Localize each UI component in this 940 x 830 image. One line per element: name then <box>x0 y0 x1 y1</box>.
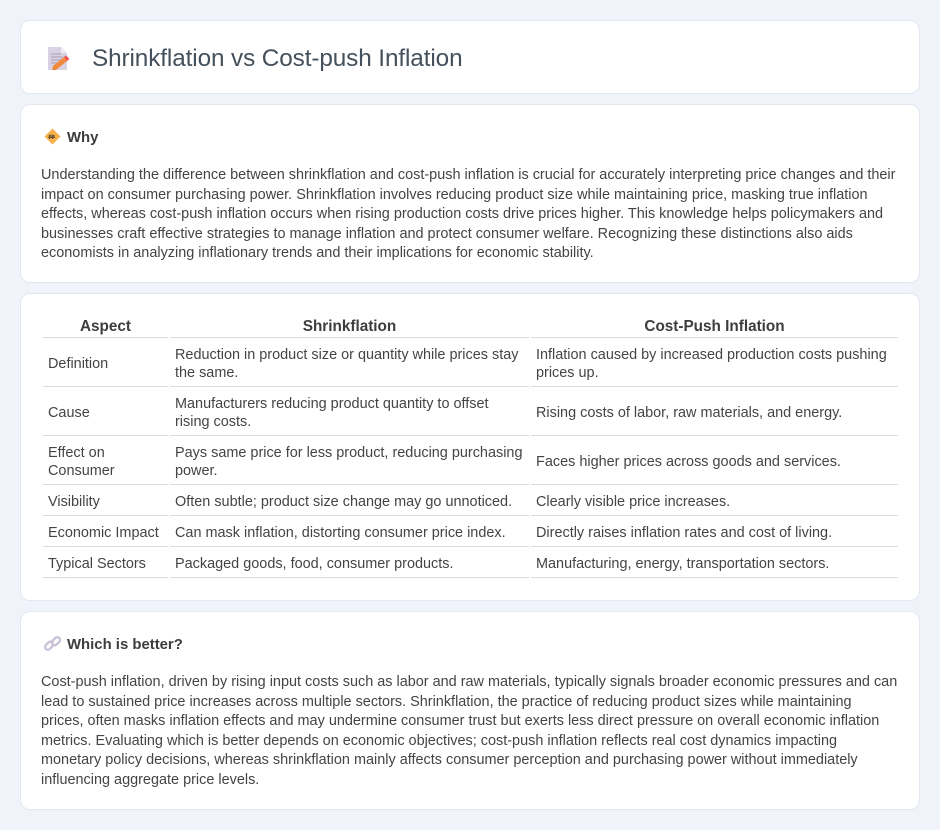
text block: which is better: Cost-push inflation, driven by rising input costs such as labor and raw materials, typically signals broader economic pressures and can <box>41 674 897 690</box>
comparison table: Typical Sectors <box>48 556 146 572</box>
comparison table: Inflation caused by increased production costs pushing <box>536 347 887 363</box>
comparison table: Rising costs of labor, raw materials, and energy. <box>536 405 842 421</box>
panel: which is better <box>20 611 920 810</box>
text block: why: Understanding the difference between shrinkflation and cost-push inflation is crucial for accurately interpreting price changes and their <box>41 167 895 183</box>
comparison table: Directly raises inflation rates and cost of living. <box>536 525 832 541</box>
comparison table: Visibility <box>48 494 100 510</box>
comparison table: the same. <box>175 365 238 381</box>
text block: why: businesses craft effective strategies to manage inflation and protect consumer welfare. Recognizing these distinctions also aids <box>41 226 853 242</box>
comparison table <box>43 318 898 578</box>
panel: comparison table <box>20 293 920 601</box>
comparison table: Faces higher prices across goods and services. <box>536 454 841 470</box>
comparison table: prices up. <box>536 365 599 381</box>
comparison table: Effect on <box>48 445 105 461</box>
table header: cost-push inflation: Cost-Push Inflation <box>644 318 785 335</box>
comparison table: Can mask inflation, distorting consumer price index. <box>175 525 506 541</box>
comparison table: power. <box>175 463 218 479</box>
heading: which is better: Which is better? <box>67 637 183 653</box>
icon: warning diamond <box>44 128 60 144</box>
panel: header <box>20 20 920 94</box>
text block: why <box>41 167 896 261</box>
comparison table: Packaged goods, food, consumer products. <box>175 556 454 572</box>
table header: aspect: Aspect <box>80 318 131 335</box>
comparison table: Clearly visible price increases. <box>536 494 730 510</box>
comparison table: Often subtle; product size change may go unnoticed. <box>175 494 512 510</box>
title: Shrinkflation vs Cost-push Inflation <box>92 45 462 72</box>
icon: document with pencil <box>48 47 70 70</box>
comparison table: Reduction in product size or quantity while prices stay <box>175 347 518 363</box>
comparison table: Cause <box>48 405 90 421</box>
text block: why: impact on consumer purchasing power. Shrinkflation involves reducing product size while maintaining price, masking true inflation <box>41 187 868 203</box>
text block: why: effects, whereas cost-push inflation occurs when rising production costs drive prices higher. This knowledge helps policymakers and <box>41 206 883 222</box>
comparison table: Manufacturing, energy, transportation sectors. <box>536 556 829 572</box>
heading: why: Why <box>67 130 98 146</box>
comparison table: Pays same price for less product, reducing purchasing <box>175 445 522 461</box>
text block: which is better: metrics. Evaluating which is better depends on economic objectives; cost-push inflation reflects real cost dynamics impacting <box>41 733 837 749</box>
text block: which is better: monetary policy decisions, whereas shrinkflation mainly affects consumer perception and purchasing power without immediately <box>41 752 858 768</box>
comparison table: Manufacturers reducing product quantity to offset <box>175 396 489 412</box>
comparison table: rising costs. <box>175 414 251 430</box>
comparison table: Definition <box>48 356 108 372</box>
comparison table: Consumer <box>48 463 115 479</box>
text block: which is better: influencing aggregate price levels. <box>41 772 259 788</box>
text block: why: economists in analyzing inflationary trends and their implications for economic stability. <box>41 245 594 261</box>
icon: link <box>44 636 61 651</box>
text block: which is better <box>41 674 897 788</box>
panel: why <box>20 104 920 283</box>
comparison table: Economic Impact <box>48 525 159 541</box>
text block: which is better: lead to sustained price increases across multiple sectors. Shrinkflation, the practice of reducing product sizes while maintaining <box>41 694 852 710</box>
text block: which is better: prices, often masks inflation effects and may undermine consumer trust but exerts less direct pressure on overall economic inflation <box>41 713 879 729</box>
table header: shrinkflation: Shrinkflation <box>303 318 396 335</box>
